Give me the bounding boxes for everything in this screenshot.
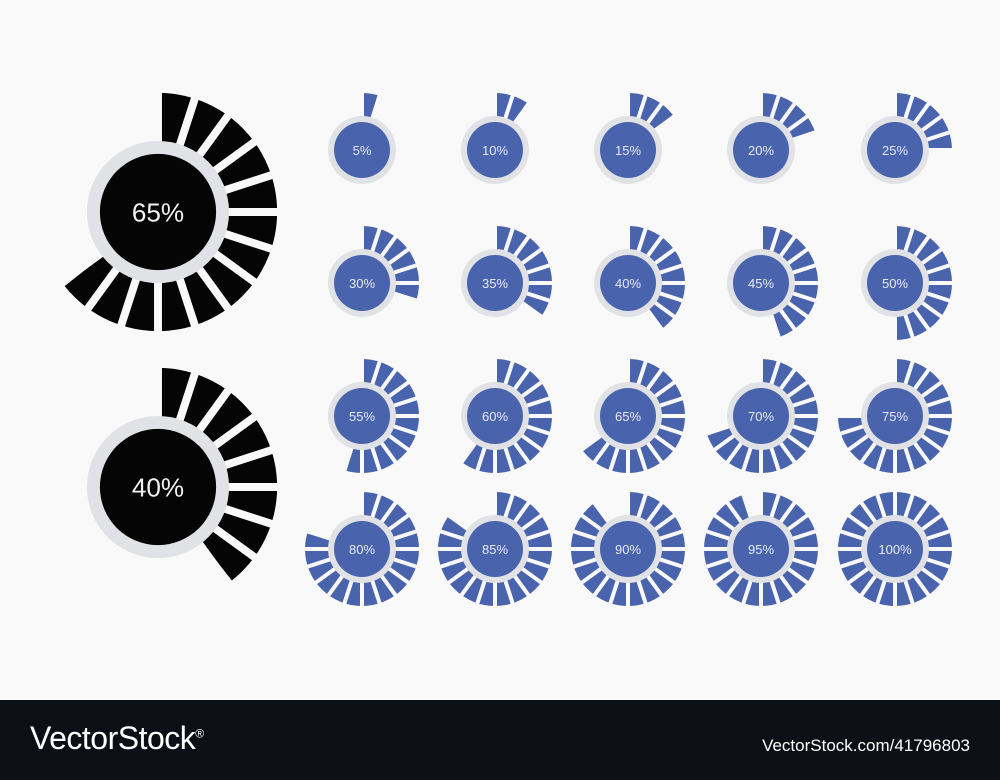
chart 35%	[461, 226, 552, 317]
chart 60%	[461, 359, 552, 473]
chart 35%: 35%	[482, 276, 508, 291]
large chart: 40%	[87, 368, 278, 580]
footer url text: VectorStock.com/41796803	[762, 736, 970, 755]
chart 20%: 20%	[748, 143, 774, 158]
footer logo text: VectorStock®	[30, 720, 204, 756]
chart 5%: 5%	[353, 143, 372, 158]
chart 55%	[328, 359, 419, 473]
chart 95%: 95%	[748, 542, 774, 557]
chart 30%	[328, 226, 419, 317]
chart 90%	[571, 492, 685, 606]
chart 85%	[438, 492, 552, 606]
chart 70%	[708, 359, 818, 473]
charts	[64, 92, 952, 606]
chart 70%: 70%	[748, 409, 774, 424]
chart 100%	[833, 487, 957, 611]
chart 95%	[704, 492, 818, 606]
chart 15%: 15%	[615, 143, 641, 158]
chart 55%: 55%	[349, 409, 375, 424]
chart 30%: 30%	[349, 276, 375, 291]
chart 25%	[861, 93, 952, 184]
chart 20%	[727, 93, 814, 184]
chart 10%	[461, 93, 529, 184]
chart 25%: 25%	[882, 143, 908, 158]
chart 80%: 80%	[349, 542, 375, 557]
chart 65%: 65%	[615, 409, 641, 424]
chart 50%: 50%	[882, 276, 908, 291]
chart 45%	[727, 226, 818, 336]
footer bar	[0, 700, 1000, 780]
chart 5%	[328, 93, 396, 184]
chart 40%	[594, 226, 685, 328]
chart 60%: 60%	[482, 409, 508, 424]
chart 40%: 40%	[615, 276, 641, 291]
chart 10%: 10%	[482, 143, 508, 158]
chart 75%	[838, 359, 952, 473]
large chart: 40%: 40%	[132, 472, 184, 502]
large chart: 65%: 65%	[132, 197, 184, 227]
chart 80%	[305, 492, 419, 606]
chart 45%: 45%	[748, 276, 774, 291]
chart 75%: 75%	[882, 409, 908, 424]
chart 100%: 100%	[878, 542, 912, 557]
chart 65%	[583, 359, 685, 473]
chart 90%: 90%	[615, 542, 641, 557]
chart 50%	[861, 226, 952, 340]
large chart: 65%	[64, 92, 278, 332]
chart 85%: 85%	[482, 542, 508, 557]
chart 15%	[594, 93, 673, 184]
